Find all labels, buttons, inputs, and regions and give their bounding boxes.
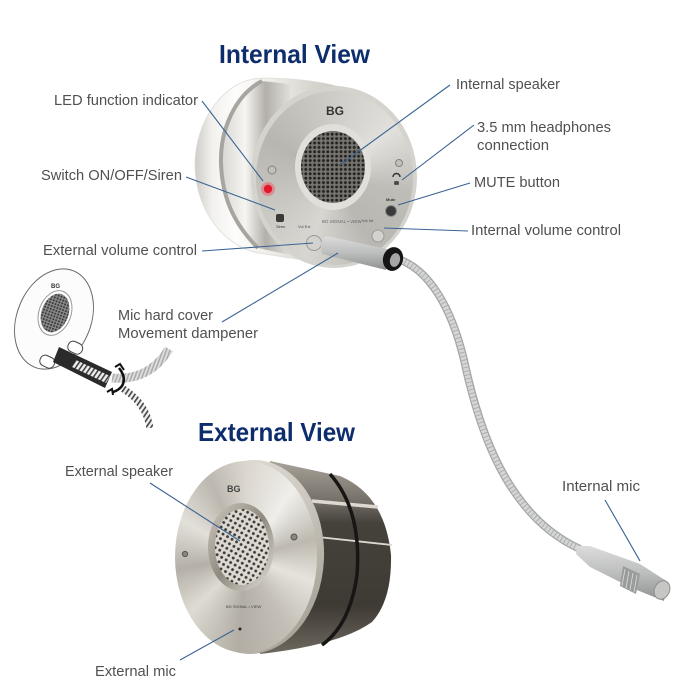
body band (221, 81, 290, 255)
speaker grille (301, 131, 365, 203)
internal volume knob (372, 230, 384, 242)
callout: external speaker (65, 464, 240, 541)
callout: mute button (398, 175, 560, 205)
device body (195, 78, 340, 266)
front face (256, 91, 413, 265)
callout: internal volume control: Internal volume control (471, 223, 621, 239)
inset plate (0, 257, 108, 381)
mute button (386, 206, 396, 216)
callout: internal speaker (340, 77, 560, 165)
inset: mic cover diagram (0, 257, 169, 428)
callout: internal mic: Internal mic (562, 479, 640, 495)
headphone icon (393, 174, 400, 184)
callout: LED function indicator: LED function indicator (54, 93, 198, 109)
callout: external volume control (43, 243, 313, 259)
mic grille (620, 566, 640, 594)
light neck (112, 349, 169, 378)
mic hard cover (321, 236, 392, 270)
callout: internal mic (562, 479, 640, 561)
logo: BG (326, 104, 344, 118)
volume labels (298, 218, 374, 229)
callout: switch (41, 168, 275, 210)
callout: headphones connection (402, 120, 611, 180)
gooseneck microphone (321, 236, 673, 602)
callout: external speaker: External speaker (65, 464, 173, 480)
title: external view: External View (198, 417, 356, 447)
collar (380, 245, 406, 273)
title: internal view: Internal View (219, 39, 371, 69)
front face (175, 461, 317, 653)
callout: internal volume control (384, 223, 621, 239)
screws (182, 534, 297, 557)
mic handle (576, 546, 668, 601)
body groove (221, 81, 262, 248)
internal device photo (195, 78, 417, 268)
model text: BG SIGNAL • VIEW (226, 604, 261, 609)
external volume knob (306, 236, 322, 250)
grille surround (295, 124, 371, 210)
mic tip (651, 578, 673, 602)
model text: BG SIGNAL • VIEW (322, 219, 362, 224)
mute label: Mute (386, 197, 396, 202)
external device photo (175, 456, 392, 658)
callout: headphones connection: 3.5 mm headphones (477, 120, 611, 136)
front rim (251, 86, 417, 268)
inset knobs (38, 340, 84, 370)
external mic hole (238, 628, 242, 630)
callout: mic hard cover: Movement dampener (118, 326, 258, 342)
callout: LED function indicator (54, 93, 263, 181)
device body (260, 461, 391, 654)
body slit (322, 474, 358, 645)
logo: BG (227, 484, 240, 494)
callout: mic hard cover (118, 253, 338, 342)
siren switch (276, 214, 284, 222)
screws (268, 160, 402, 174)
callout: external volume control: External volume control (43, 243, 197, 259)
body highlights (312, 501, 392, 545)
flexible neck (395, 258, 580, 549)
callout: switch: Switch ON/OFF/Siren (41, 168, 182, 184)
LED indicator (261, 182, 275, 196)
callout: headphones connection: connection (477, 138, 549, 154)
callout: external mic (95, 630, 234, 680)
callout: mic hard cover: Mic hard cover (118, 308, 213, 324)
dark neck (122, 388, 150, 428)
grille surround (208, 503, 274, 591)
switch label: Siren (276, 224, 285, 229)
rotation arrows (107, 364, 124, 395)
volume labels: Vol Ext (298, 224, 311, 229)
inset logo: BG (51, 284, 60, 290)
metal rim (175, 456, 329, 658)
inset grille (32, 286, 78, 340)
callout: mute button: MUTE button (474, 175, 560, 191)
callout: external mic: External mic (95, 664, 176, 680)
volume labels: Vol Int (362, 218, 374, 223)
speaker grille (215, 509, 269, 585)
inset cover (53, 347, 112, 388)
callout: internal speaker: Internal speaker (456, 77, 560, 93)
